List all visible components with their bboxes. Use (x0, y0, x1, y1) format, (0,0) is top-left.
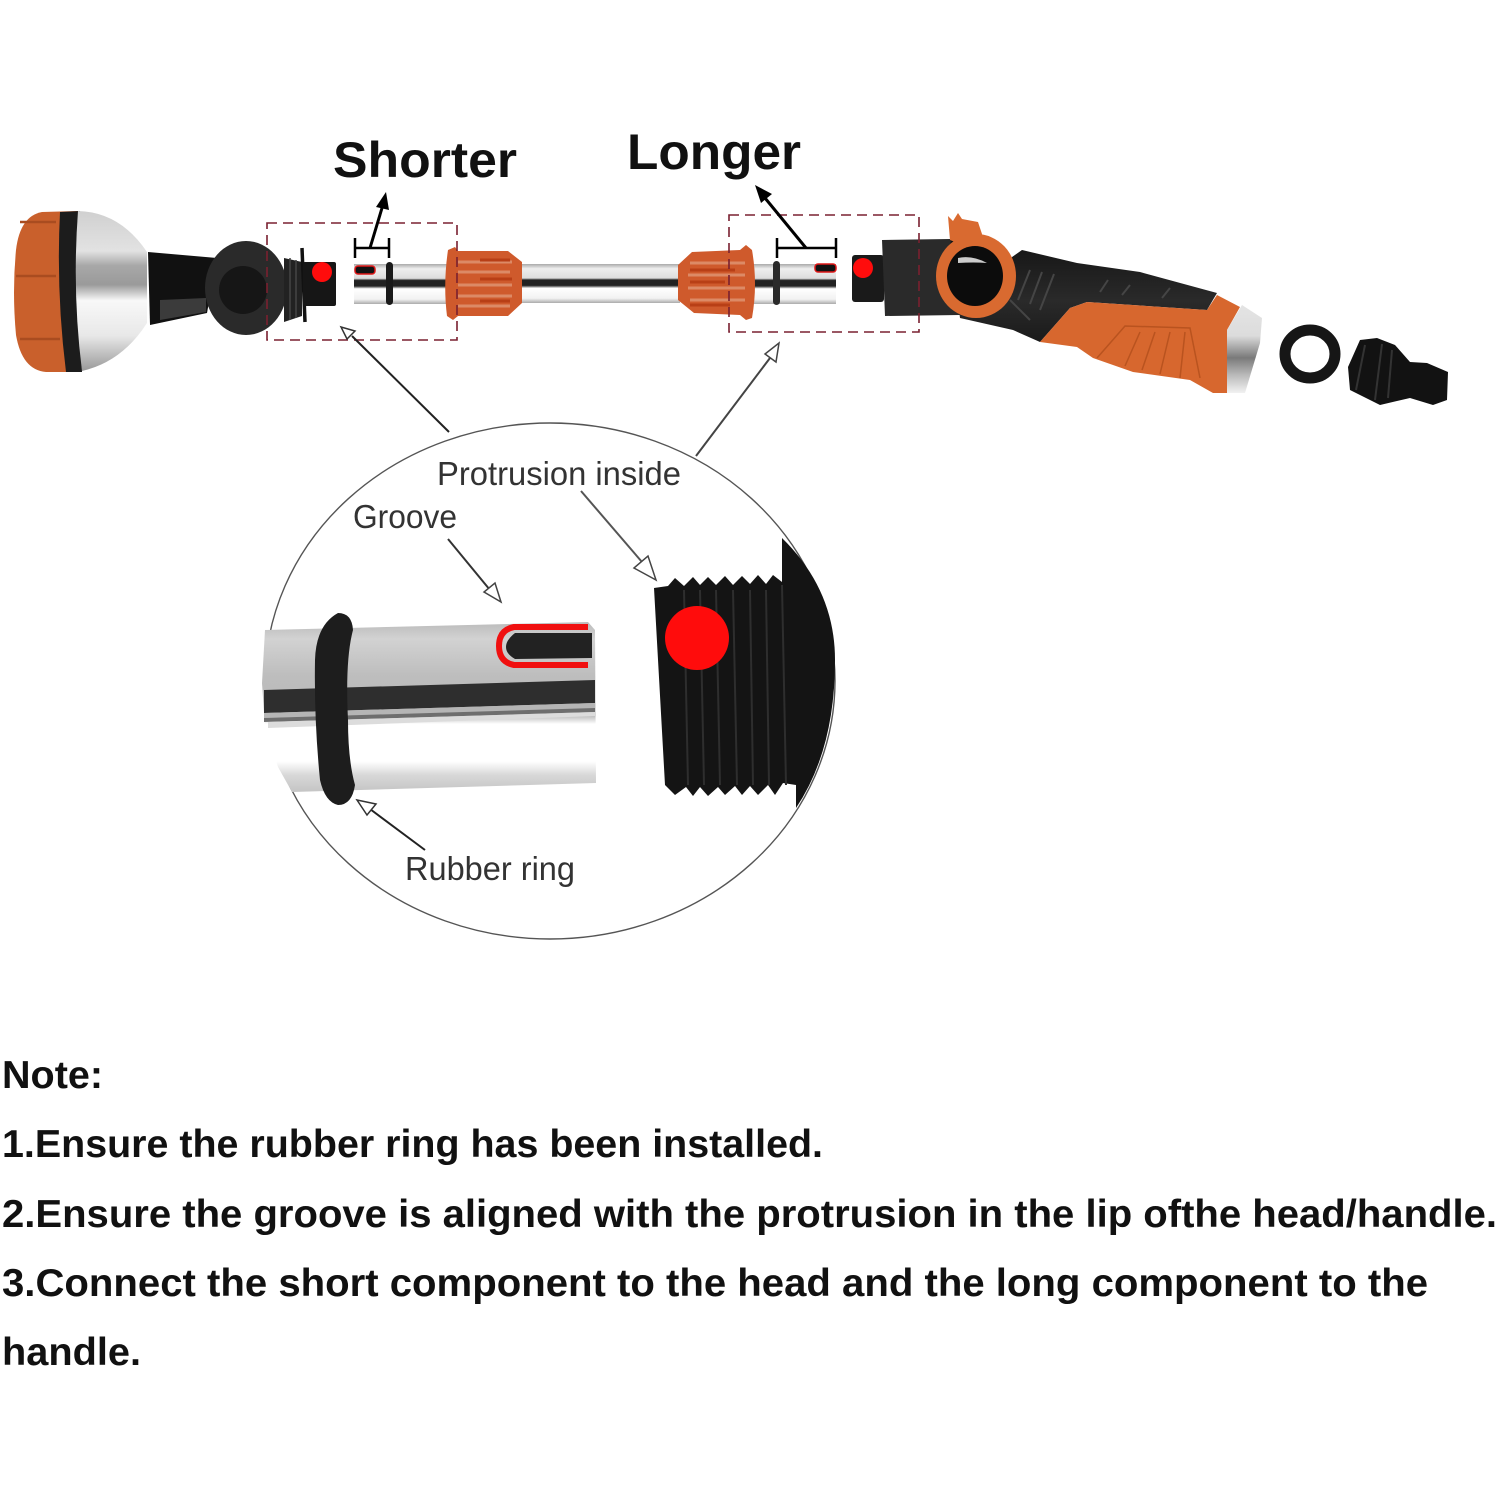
leader arrow: to long end (696, 343, 779, 456)
rubber ring: short end (386, 262, 393, 305)
detail: groove (499, 627, 592, 665)
slot: long end (815, 264, 836, 272)
heading: Longer: Longer (627, 124, 801, 180)
detail: red protrusion dot (665, 606, 729, 670)
heading: Shorter: Shorter (333, 132, 517, 188)
note line 1: 1.Ensure the rubber ring has been installed. (2, 1123, 823, 1166)
label: Protrusion inside: Protrusion inside (437, 455, 681, 492)
detail: metal tube (262, 613, 596, 805)
dashed highlight: short end (267, 223, 457, 340)
selector dial (936, 234, 1016, 318)
note text block (2, 1054, 1497, 1374)
note line 3 continued: handle. (2, 1331, 141, 1374)
bracket and arrow: longer (755, 185, 836, 258)
spray handle (852, 213, 1262, 393)
bracket and arrow: shorter (355, 192, 389, 258)
note line 3: 3.Connect the short component to the head and the long component to the (2, 1262, 1428, 1305)
note line 2: 2.Ensure the groove is aligned with the protrusion in the lip ofthe head/handle. (2, 1193, 1497, 1236)
arrow: rubber ring (357, 800, 425, 850)
red dot: head protrusion (312, 262, 332, 282)
rubber ring: long end (773, 261, 780, 305)
leader arrow: to short end (341, 327, 449, 432)
label: Rubber ring: Rubber ring (405, 850, 575, 887)
orange connector: left (445, 247, 522, 320)
label: Groove: Groove (353, 498, 457, 535)
detail: rubber ring (315, 613, 355, 805)
red dot: handle protrusion (853, 258, 873, 278)
hose adapter (1348, 338, 1448, 405)
note heading: Note: (2, 1054, 103, 1097)
detail circle (262, 423, 835, 939)
arrow: protrusion (581, 491, 656, 580)
arrow: groove (448, 539, 501, 602)
nozzle head (14, 211, 336, 372)
slot: short end (355, 266, 375, 274)
washer ring (1285, 330, 1335, 378)
dashed highlight: long end (729, 215, 919, 332)
orange connector: right (678, 245, 755, 320)
extension tube with connectors (354, 245, 836, 320)
detail: threaded fitting (654, 538, 835, 808)
